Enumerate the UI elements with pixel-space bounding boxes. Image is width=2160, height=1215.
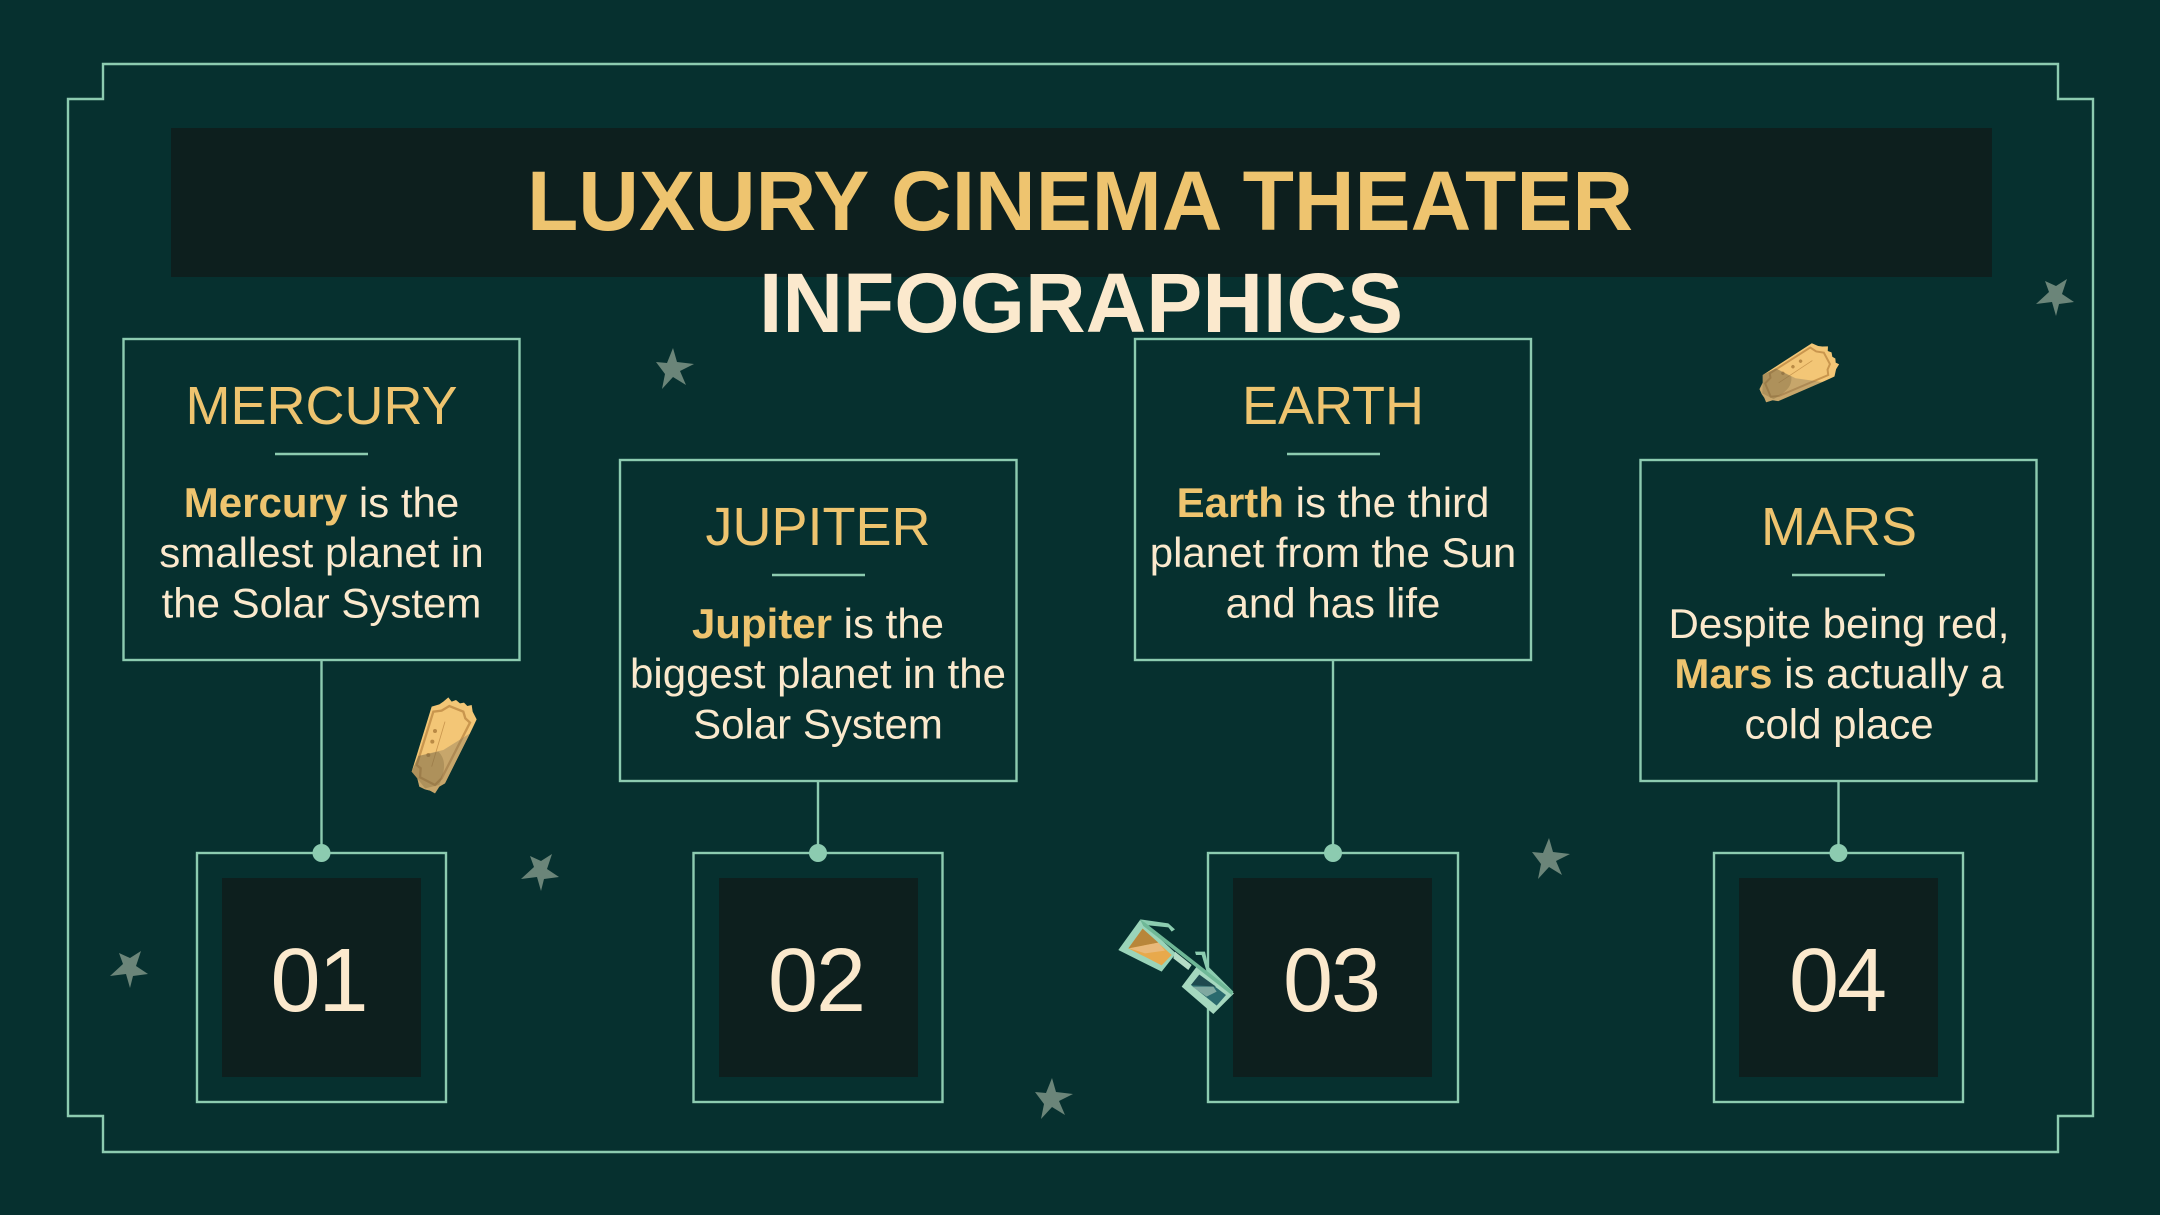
number box <box>694 844 942 1102</box>
star <box>110 951 148 988</box>
connector line <box>320 660 323 853</box>
star <box>1532 838 1570 879</box>
title <box>527 154 1633 350</box>
number box: 02 <box>768 931 864 1031</box>
description: planet from the Sun <box>1150 529 1516 576</box>
heading: EARTH <box>1242 376 1424 436</box>
connector line <box>817 781 819 853</box>
icon: 3D glasses <box>1118 919 1234 1014</box>
icon: cinema ticket right <box>1751 326 1847 425</box>
icon: cinema ticket left <box>412 697 477 793</box>
number box <box>1714 844 1963 1102</box>
connector line <box>1837 781 1840 853</box>
description: biggest planet in the <box>630 650 1006 697</box>
info card <box>124 339 520 660</box>
info card <box>620 460 1016 781</box>
star <box>2036 279 2074 316</box>
title banner <box>171 128 1992 277</box>
connector line <box>1332 660 1334 853</box>
description: cold place <box>1744 700 1934 748</box>
description: Mars <box>1674 650 1772 697</box>
title: INFOGRAPHICS <box>759 256 1403 350</box>
description: is actually a <box>1772 650 2004 697</box>
description: Despite being red, <box>1669 600 2009 647</box>
number box <box>197 844 446 1102</box>
description: and has life <box>1226 580 1440 626</box>
description: Earth <box>1177 479 1284 526</box>
description: smallest planet in <box>159 529 484 576</box>
number box: 03 <box>1283 931 1379 1031</box>
panel: Jupiter step <box>620 460 1016 1102</box>
description: Jupiter <box>692 600 832 647</box>
star <box>1035 1078 1073 1119</box>
panel: Mercury step <box>124 339 520 1102</box>
description: is the third <box>1284 479 1489 526</box>
title: LUXURY CINEMA THEATER <box>527 154 1633 248</box>
info card <box>1135 339 1531 660</box>
number box: 04 <box>1789 931 1885 1031</box>
description: Mercury <box>184 479 348 526</box>
description: Solar System <box>693 700 943 748</box>
panel: Earth step <box>1135 339 1531 1102</box>
heading: MARS <box>1761 497 1917 557</box>
panel: Mars step <box>1640 460 2036 1102</box>
info card <box>1640 460 2036 781</box>
number box: 01 <box>270 931 367 1031</box>
description: is the <box>832 600 944 647</box>
description: is the <box>347 479 459 526</box>
heading: JUPITER <box>705 497 931 557</box>
number box <box>1208 844 1458 1102</box>
heading: MERCURY <box>185 376 458 436</box>
description: the Solar System <box>162 580 481 626</box>
star <box>521 854 559 891</box>
star <box>656 348 694 389</box>
